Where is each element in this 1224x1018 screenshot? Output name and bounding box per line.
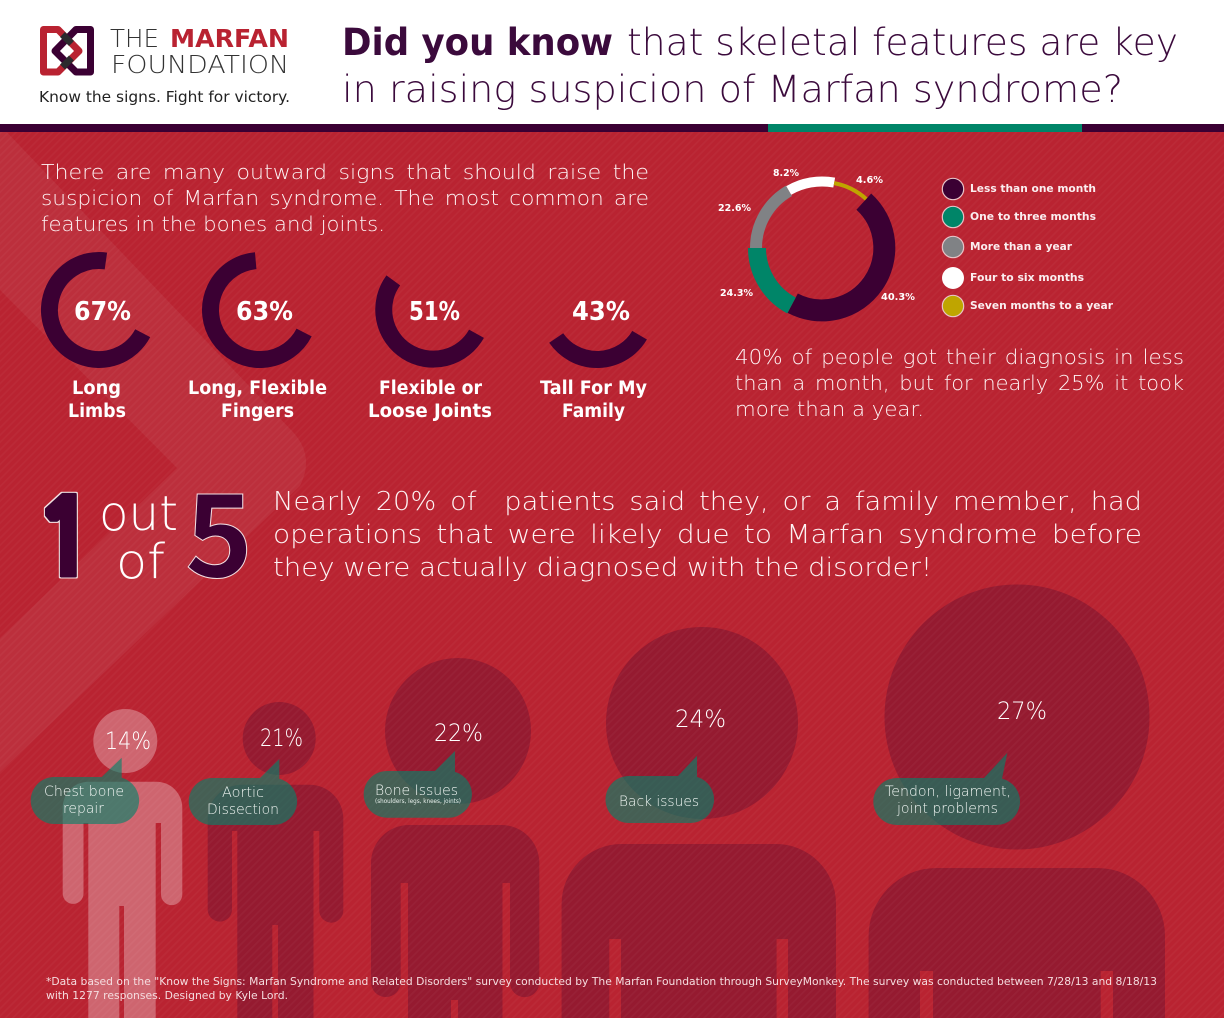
callout: back issues	[606, 756, 714, 823]
1 out of 5	[34, 445, 253, 611]
legend: Seven months to a year	[970, 299, 1114, 312]
percentages on heads: 24%	[675, 705, 726, 733]
percentages on heads: 22%	[434, 719, 483, 747]
percentages on heads: 14%	[105, 727, 151, 755]
ring: 67% long limbs: 67%	[74, 297, 131, 327]
ring: 51% flexible or loose joints	[368, 280, 492, 422]
callout: bone issues: Bone Issues	[375, 783, 458, 799]
footnote: *Data based on the "Know the Signs: Marfan Syndrome and Related Disorders" survey conducted by The Marfan Foundation through SurveyMonkey. The survey was conducted between 7/28/13 and 8/18/13	[46, 976, 1157, 988]
tagline: Know the signs. Fight for victory.	[39, 88, 290, 106]
ring: 51% flexible or loose joints: Loose Joints	[368, 401, 492, 422]
figure: 14% chest bone repair	[63, 709, 182, 1018]
figure: 24% back issues	[562, 627, 836, 1018]
percentages on heads: 21%	[260, 724, 303, 752]
callout: aortic dissection: Aortic	[222, 785, 264, 801]
title: in raising suspicion of Marfan syndrome?	[342, 68, 1123, 111]
callout: chest bone repair: Chest bone	[44, 784, 124, 800]
1 out of 5: 1	[34, 488, 98, 590]
ring: 63% long flexible fingers: Fingers	[221, 401, 294, 422]
legend: More than a year	[970, 240, 1073, 253]
ring: 67% long limbs	[49, 261, 143, 422]
background chevron	[0, 125, 306, 772]
callout: bone issues	[364, 751, 472, 818]
icon: Marfan Foundation mark	[44, 30, 90, 72]
diagnosis text: more than a year.	[735, 397, 924, 421]
operations text	[273, 487, 1142, 583]
ring: 63% long flexible fingers: Long, Flexible	[188, 378, 327, 399]
title	[342, 21, 1178, 111]
logo wordmark: THE	[110, 24, 159, 53]
diagnosis text: than a month, but for nearly 25% it took	[735, 371, 1184, 395]
callout: bone issues: (shoulders, legs, knees, joints)	[375, 798, 461, 805]
header band	[0, 0, 1224, 132]
segment: 4.6% seven months to a year	[834, 183, 866, 199]
ring: 67% long limbs: Long	[72, 378, 121, 399]
legend	[942, 178, 1114, 317]
ring: 43% tall for my family: 43%	[572, 297, 630, 327]
ring: 43% tall for my family: Tall For My	[540, 378, 647, 399]
logo wordmark: MARFAN	[170, 24, 289, 53]
person figures	[63, 584, 1165, 1018]
operations text: Nearly 20% of patients said they, or a family member, had	[273, 487, 1142, 517]
ring: 63% long flexible fingers	[188, 261, 327, 422]
donut labels: 4.6%	[856, 175, 883, 186]
figure: 21% aortic dissection	[208, 702, 343, 1018]
ring: 51% flexible or loose joints: 51%	[409, 297, 460, 327]
percentages on heads: 27%	[997, 697, 1047, 725]
ring: 51% flexible or loose joints: Flexible or	[379, 378, 483, 399]
callout: aortic dissection: Dissection	[207, 802, 279, 818]
1 out of 5: of	[116, 534, 165, 590]
1 out of 5: out	[99, 486, 178, 542]
callout: aortic dissection	[189, 759, 297, 825]
callout: back issues: Back issues	[619, 794, 699, 810]
percentages on heads	[105, 697, 1047, 755]
callout: tendon, ligament, joint problems	[873, 753, 1020, 825]
figure: 27% tendon, ligament, joint problems	[869, 584, 1165, 1018]
segment: 8.2% four to six months	[789, 181, 834, 190]
segment: 40.3% less than one month	[793, 202, 884, 310]
operations text: operations that were likely due to Marfan syndrome before	[273, 520, 1142, 550]
title: Did you know	[342, 21, 613, 64]
title: that skeletal features are key	[627, 21, 1178, 64]
logo	[39, 24, 290, 106]
ring: 43% tall for my family: Family	[562, 401, 625, 422]
donut labels	[718, 168, 915, 303]
intro text: features in the bones and joints.	[41, 212, 385, 236]
ring: 63% long flexible fingers: 63%	[236, 297, 293, 327]
segment: 24.3% one to three months	[757, 248, 792, 305]
diagnosis text: 40% of people got their diagnosis in less	[735, 345, 1184, 369]
intro text: There are many outward signs that should raise the	[41, 160, 649, 184]
legend: One to three months	[970, 210, 1096, 223]
logo wordmark	[110, 24, 289, 79]
ring: 67% long limbs: Limbs	[68, 401, 126, 422]
segment: 22.6% more than a year	[756, 191, 789, 248]
callout: chest bone repair: repair	[63, 801, 104, 817]
legend: Four to six months	[970, 271, 1084, 284]
donut labels: 22.6%	[718, 203, 751, 214]
donut chart	[756, 181, 884, 310]
operations text: they were actually diagnosed with the disorder!	[273, 553, 932, 583]
logo wordmark: FOUNDATION	[111, 50, 289, 79]
diagnosis text	[735, 345, 1184, 421]
footnote	[46, 976, 1157, 1002]
callout: tendon, ligament, joint problems: joint problems	[896, 801, 998, 817]
figure: 22% bone issues	[371, 658, 539, 1018]
legend: Less than one month	[970, 182, 1096, 195]
ring: 43% tall for my family	[540, 297, 647, 422]
footnote: with 1277 responses. Designed by Kyle Lord.	[46, 990, 288, 1002]
donut labels: 40.3%	[881, 292, 915, 303]
callout: tendon, ligament, joint problems: Tendon, ligament,	[885, 784, 1011, 800]
intro text: suspicion of Marfan syndrome. The most common are	[41, 186, 649, 210]
intro text	[41, 160, 649, 236]
1 out of 5: 5	[185, 445, 253, 611]
donut labels: 24.3%	[720, 288, 753, 299]
callout: chest bone repair	[31, 758, 139, 824]
donut labels: 8.2%	[773, 168, 799, 179]
